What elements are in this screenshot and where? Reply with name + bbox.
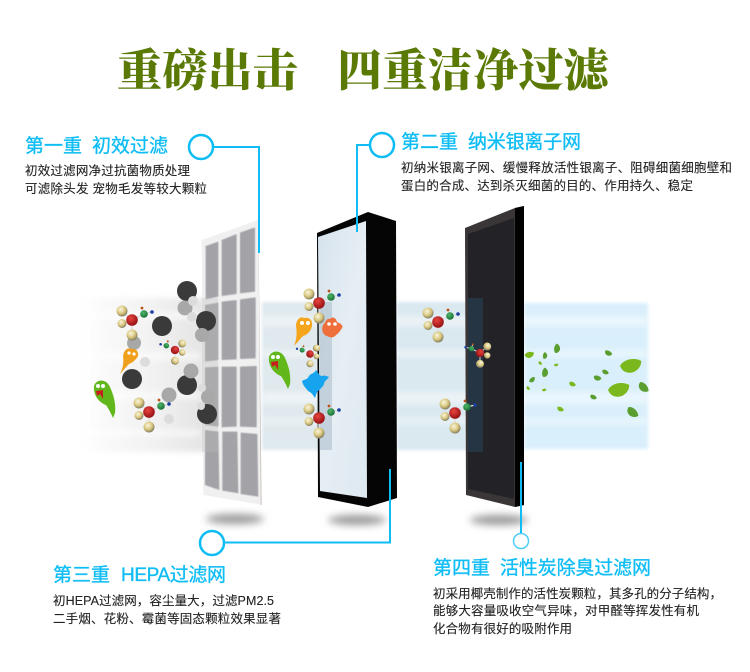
text block: first filter — [25, 135, 207, 196]
text block: first filter: 可滤除头发 宠物毛发等较大颗粒 — [25, 181, 207, 196]
filter shadows — [206, 514, 528, 525]
germ: green left — [94, 380, 115, 418]
text block: third filter: 初HEPA过滤网，容尘量大，过滤PM2.5 — [53, 593, 274, 608]
title: 重磅出击 — [117, 46, 298, 96]
germ: blue on filter 2 — [302, 370, 329, 398]
filter 2: nano silver filter panel — [317, 212, 397, 507]
filter 1: primary filter panel — [202, 220, 262, 505]
germ: red-orange on filter 2 — [322, 318, 343, 337]
text block: first filter: 第一重 — [25, 135, 82, 157]
text block: third filter: HEPA过滤网 — [121, 564, 226, 586]
callout: fourth filter connector — [514, 462, 528, 548]
germ: orange on filter 2 — [294, 317, 312, 346]
text block: fourth filter: 第四重 — [433, 557, 490, 579]
germ: green middle — [269, 352, 290, 389]
text block: fourth filter: 活性炭除臭过滤网 — [500, 557, 651, 579]
text block: fourth filter: 初采用椰壳制作的活性炭颗粒，其多孔的分子结构， — [433, 586, 722, 601]
airflow background bands — [70, 298, 648, 452]
text block: fourth filter: 能够大容量吸收空气异味，对甲醛等挥发性有机 — [433, 603, 699, 618]
text block: second filter: 纳米银离子网 — [468, 131, 581, 153]
gas molecules — [116, 288, 491, 438]
text block: second filter: 第二重 — [401, 131, 458, 153]
text block: second filter: 蛋白的合成、达到杀灭细菌的目的、作用持久、稳定 — [401, 178, 693, 193]
dust particles — [122, 281, 217, 424]
text block: first filter: 初效过滤网净过抗菌物质处理 — [25, 163, 190, 178]
green leaves — [525, 343, 650, 420]
text block: second filter: 初纳米银离子网、缓慢释放活性银离子、阻碍细菌细胞壁和 — [401, 160, 732, 175]
text block: third filter — [53, 564, 281, 626]
text block: third filter: 二手烟、花粉、霉菌等固态颗粒效果显著 — [53, 611, 281, 626]
text block: fourth filter: 化合物有很好的吸附作用 — [433, 621, 572, 636]
text block: third filter: 第三重 — [53, 564, 110, 586]
title — [117, 46, 613, 96]
filter 3: activated carbon filter panel — [465, 206, 524, 507]
text block: fourth filter — [433, 557, 722, 636]
callout: first filter connector — [189, 135, 259, 253]
text block: second filter — [401, 131, 732, 193]
callout: second filter connector — [357, 133, 394, 232]
title: 四重洁净过滤 — [337, 46, 613, 96]
text block: first filter: 初效过滤 — [92, 135, 168, 157]
germ: orange left — [120, 348, 138, 374]
callout: third filter connector — [200, 469, 390, 555]
